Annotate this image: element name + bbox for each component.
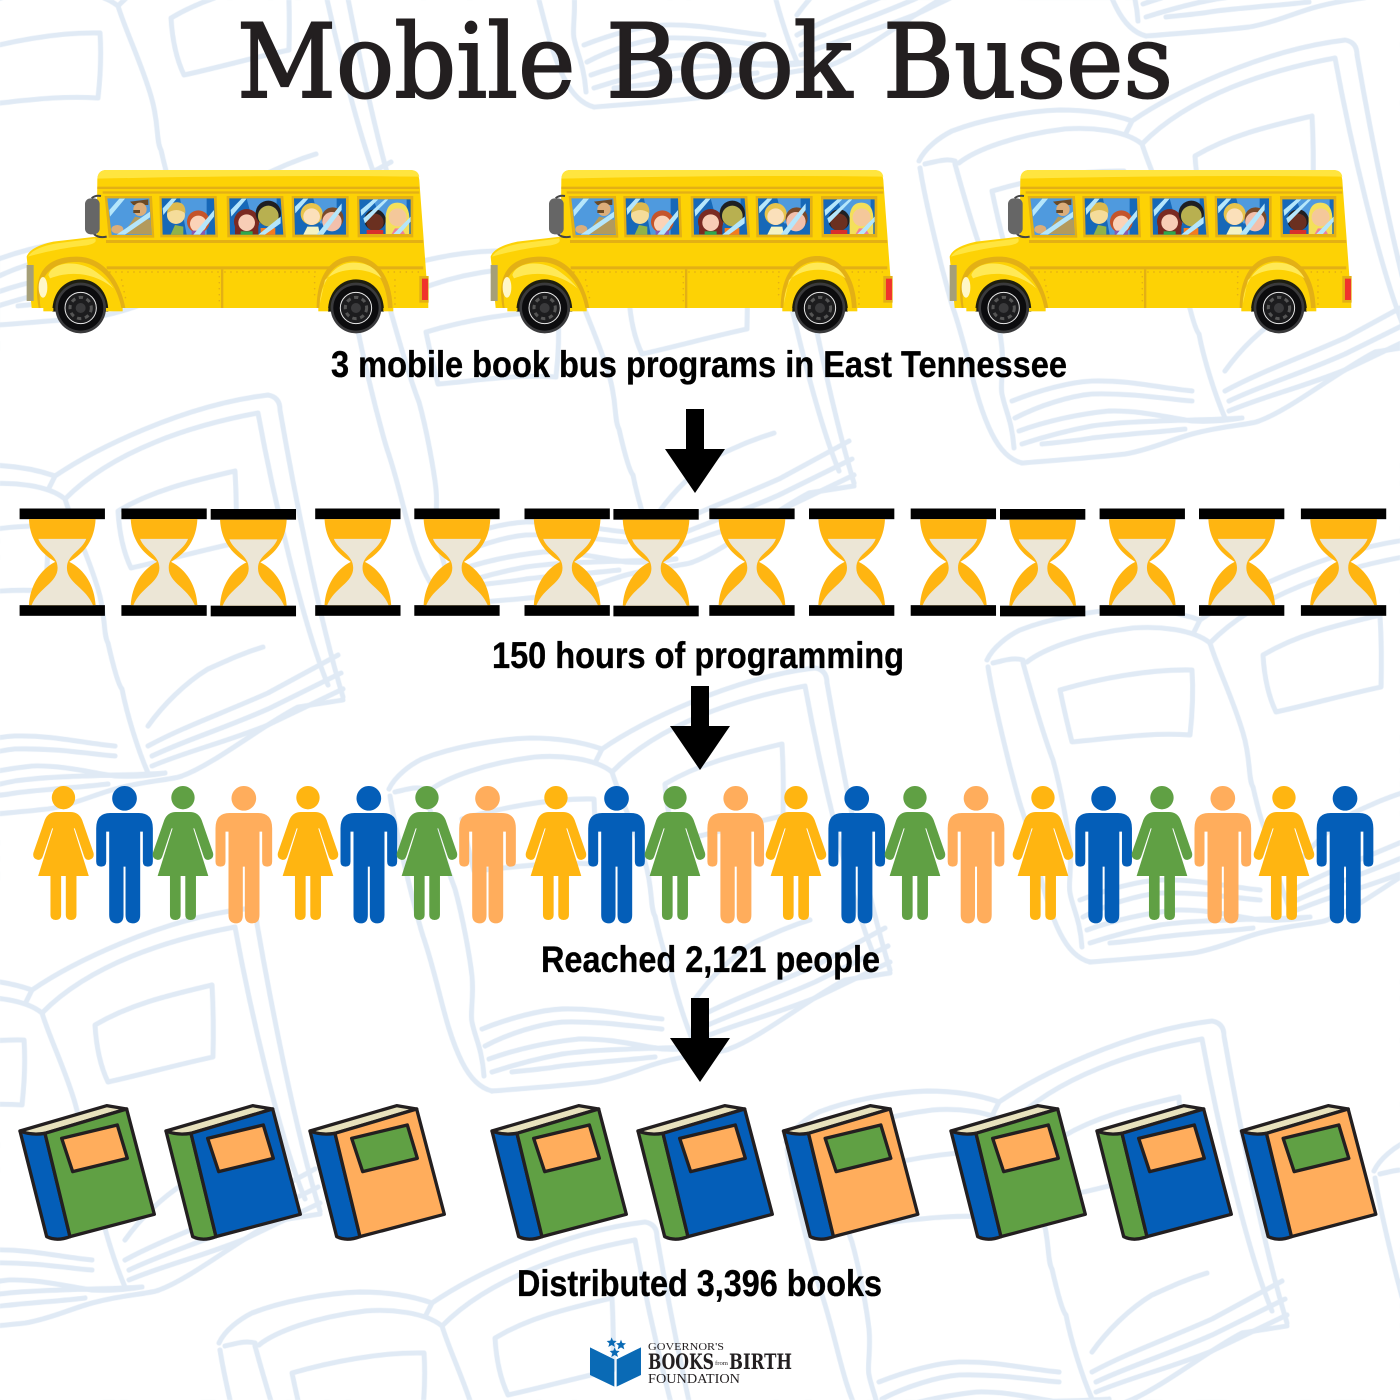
logo: Governor's Books from Birth Foundation: GOVERNOR'S [648, 1341, 724, 1353]
caption: hours: 150 hours of programming [492, 635, 904, 676]
school buses row [27, 170, 1352, 333]
logo: Governor's Books from Birth Foundation: from [715, 1360, 728, 1367]
caption: bus programs: 3 mobile book bus programs in East Tennessee [331, 344, 1067, 385]
logo: Governor's Books from Birth Foundation: BIRTH [729, 1349, 792, 1374]
people row [33, 786, 1373, 923]
logo: Governor's Books from Birth Foundation: BOOKS [648, 1349, 714, 1374]
arrow: buses to hours [665, 409, 725, 493]
arrow: people to books [670, 998, 730, 1082]
title: Mobile Book Buses [237, 3, 1173, 122]
hourglass row [20, 508, 1386, 616]
logo: Governor's Books from Birth Foundation: FOUNDATION [648, 1372, 740, 1387]
arrow: hours to people [670, 686, 730, 770]
books row [20, 1106, 1376, 1239]
caption: books: Distributed 3,396 books [517, 1263, 882, 1304]
logo: Governor's Books from Birth Foundation [590, 1337, 792, 1387]
caption: people: Reached 2,121 people [541, 939, 880, 980]
